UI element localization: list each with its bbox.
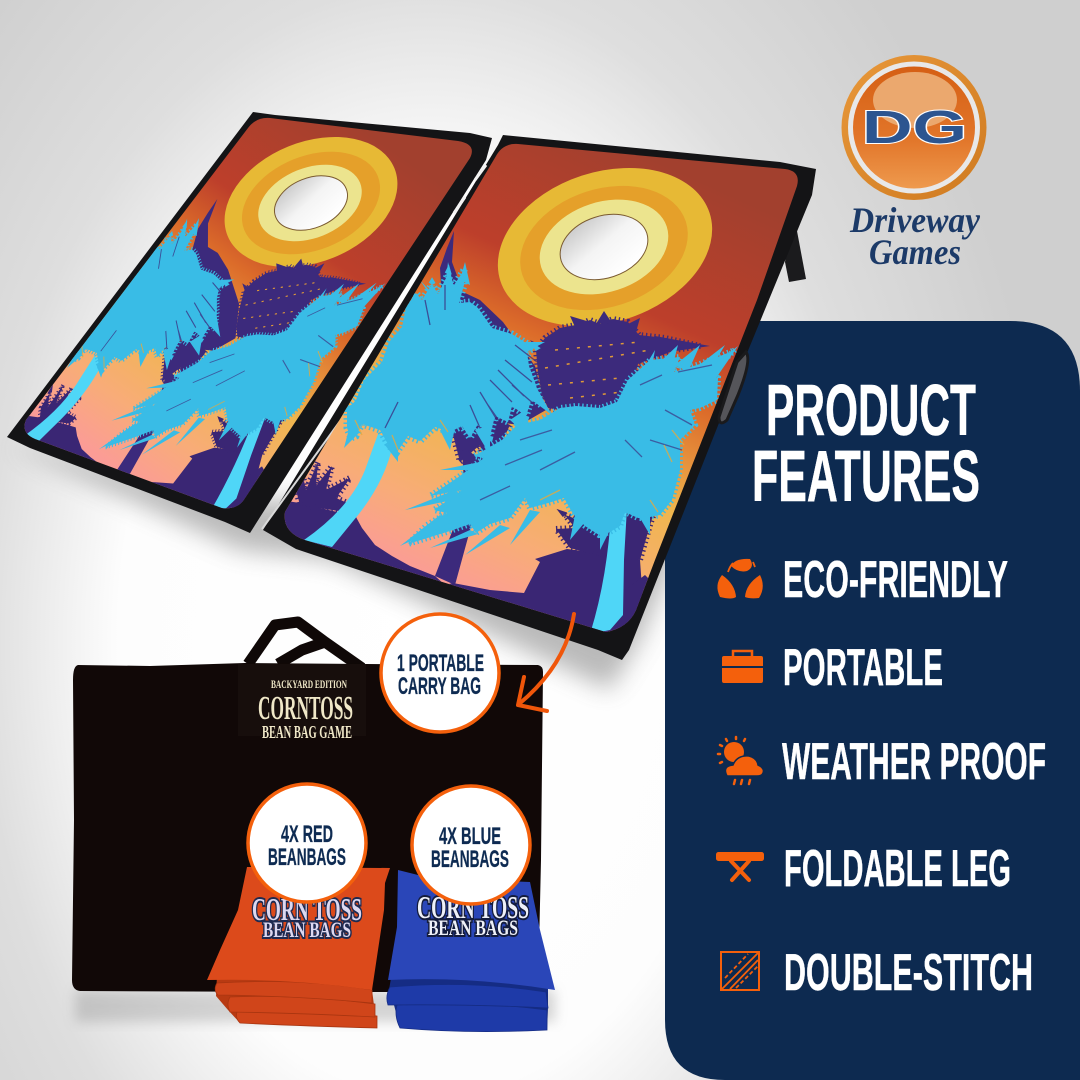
right sky	[270, 130, 810, 640]
bag shadow	[75, 990, 555, 1022]
logo badge	[842, 55, 986, 200]
board: hinge gap line	[262, 258, 458, 529]
icon: carry case	[722, 651, 763, 683]
blue bag logo: CORN TOSS	[417, 889, 529, 925]
callout: blue beanbags: 4X BLUE	[439, 823, 501, 850]
right ground	[284, 461, 656, 632]
board: right frame	[263, 135, 816, 660]
right board artwork	[284, 144, 798, 632]
red stack lower bags	[215, 982, 377, 1028]
blue beanbags	[387, 870, 555, 1032]
icon: sun cloud rain	[718, 737, 763, 784]
feature: double-stitch	[721, 944, 1033, 1002]
bag body	[72, 663, 543, 992]
left ground	[24, 384, 284, 508]
board: right leg	[785, 228, 806, 282]
blue stack underlay	[389, 972, 548, 1030]
icon: recycling leaves	[717, 559, 763, 598]
left front palm	[99, 282, 386, 508]
callout: carry bag	[381, 614, 499, 732]
red bag logo: BEAN BAGS	[263, 917, 351, 942]
label: PORTABLE	[783, 639, 943, 697]
blue bag logo: BEAN BAGS	[428, 915, 518, 940]
callout: carry bag: CARRY BAG	[398, 673, 481, 700]
right front palm	[400, 345, 738, 634]
icon: stitched square	[721, 952, 759, 990]
callout: red beanbags: 4X RED	[281, 821, 333, 848]
logo badge: DG	[862, 101, 967, 153]
blue top bag	[388, 870, 555, 990]
right palm silhouettes	[435, 231, 710, 585]
red bag logo: CORN TOSS	[252, 891, 362, 927]
bag pocket	[238, 664, 366, 736]
blue bag logo	[417, 889, 529, 940]
callout: blue beanbags	[412, 786, 530, 904]
icon: folding table	[716, 852, 764, 880]
cornhole boards	[0, 100, 816, 700]
board: left frame	[7, 112, 492, 533]
red top bag	[207, 867, 390, 990]
feature: portable	[722, 639, 943, 697]
board: rope handle	[719, 352, 748, 423]
carry bag	[72, 622, 543, 992]
arrow: to carry bag	[518, 614, 574, 711]
right sun rings	[498, 168, 712, 326]
bag logo: BACKYARD EDITION	[271, 677, 347, 691]
bag logo	[258, 677, 353, 742]
left sky	[24, 118, 472, 508]
board shadow	[10, 445, 700, 690]
red beanbags	[207, 867, 390, 1028]
feature: eco-friendly	[717, 551, 1008, 609]
board: hinge slots	[454, 165, 486, 213]
blue stack lower bags	[387, 984, 548, 1032]
callout: carry bag: 1 PORTABLE	[397, 650, 484, 677]
bag logo: BEAN BAG GAME	[262, 722, 352, 742]
right cyan palm	[304, 262, 552, 547]
panel: product features	[665, 321, 1080, 1080]
callout: red beanbags: BEANBAGS	[268, 844, 346, 871]
feature: foldable leg	[716, 840, 1011, 898]
heading	[752, 370, 980, 517]
bag logo: CORNTOSS	[258, 690, 353, 727]
logo: driveway games	[842, 55, 986, 272]
feature: weather proof	[718, 733, 1046, 791]
bag handles	[248, 622, 362, 668]
left sun rings	[224, 137, 398, 267]
red stack underlay	[216, 975, 377, 1028]
logo wordmark: Games	[869, 232, 961, 272]
logo wordmark	[849, 200, 981, 272]
callout: blue beanbags: BEANBAGS	[431, 846, 509, 873]
left cyan palm	[27, 218, 234, 440]
callout: red beanbags	[248, 784, 366, 902]
red bag logo	[252, 891, 362, 942]
left board artwork	[24, 118, 472, 508]
left palm silhouettes	[117, 199, 366, 474]
logo wordmark: Driveway	[849, 200, 981, 240]
